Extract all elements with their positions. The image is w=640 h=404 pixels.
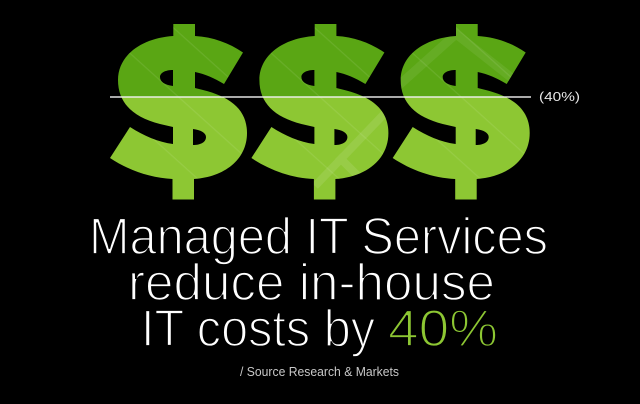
heading [89, 208, 548, 358]
heading line 3: IT costs by [141, 300, 375, 358]
highlighted figure: 40%: 40% [388, 300, 498, 358]
icon: dollar sign 3 [393, 24, 530, 200]
heading line 1: Managed IT Services [89, 208, 548, 266]
source note: / Source Research & Markets [240, 364, 399, 379]
label: 40 percent: (40%) [539, 89, 580, 104]
reduction line [110, 96, 531, 98]
infographic canvas [94, 24, 580, 376]
heading line 2: reduce in-house [128, 254, 495, 312]
icon: three dollar signs [110, 24, 530, 200]
icon: dollar sign 1 [110, 24, 247, 200]
icon: dollar sign 2 [251, 24, 388, 200]
